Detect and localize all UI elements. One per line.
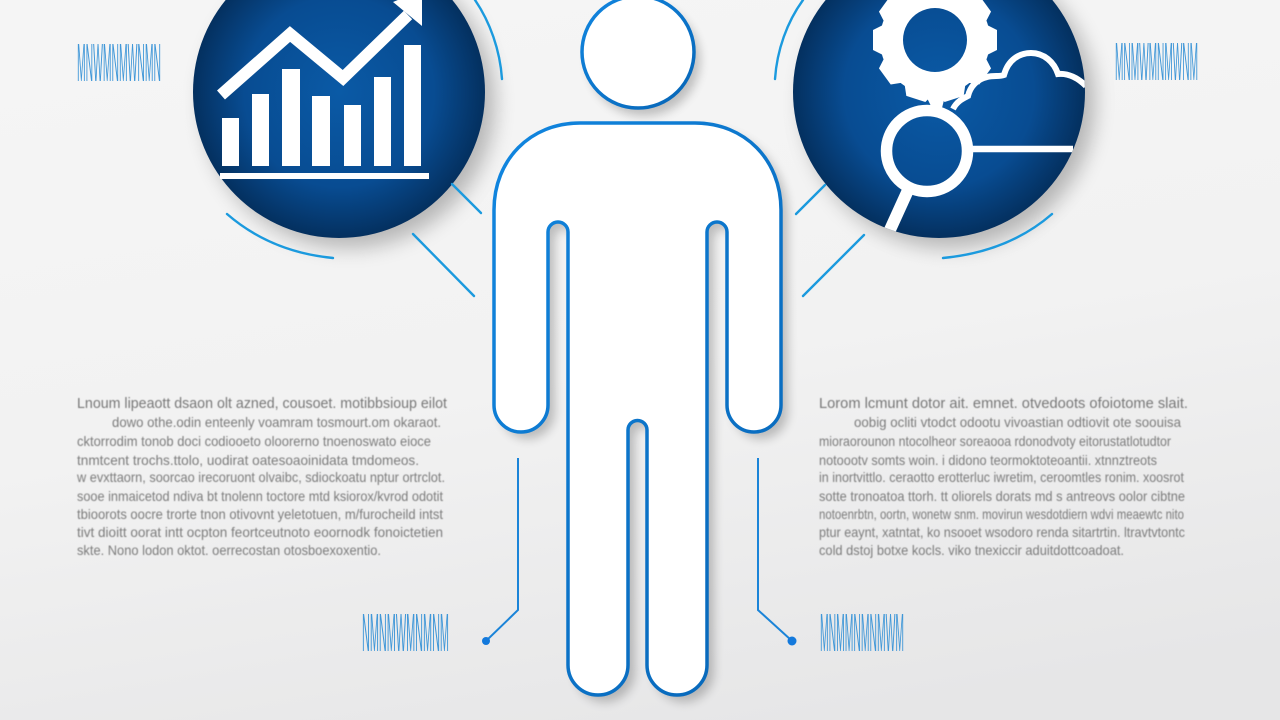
connector: chart disc long line [413,234,474,296]
connector: gear disc long line [803,235,864,296]
text block: left: tnmtcent trochs.ttolo, uodirat oatesoaoinidata tmdomeos. [77,452,419,468]
icon: rising trend arrow [221,0,422,95]
text block: left: dowo othe.odin enteenly voamram tosmourt.om okaraot. [112,414,441,430]
head [582,0,694,108]
text block: right: ptur eaynt, xatntat, ko nsooet wsodoro renda sitartrtin. ltravtvtontc [819,524,1185,540]
icon: gear [873,0,997,108]
text block: left: skte. Nono lodon oktot. oerrecostan otosboexoxentio. [77,542,381,558]
text block: right: cold dstoj botxe kocls. viko tnexiccir aduitdottcoadoat. [819,542,1124,558]
text: NMNMWMNMNM [362,603,449,663]
text block: left [76,395,448,558]
text: MNMMNMNMWM [820,603,904,663]
text block: right: in inortvittlo. ceraotto erotterluc iwretim, ceroomtles ronim. xoosrot [819,469,1184,485]
text block: left: Lnoum lipeaott dsaon olt azned, cousoet. motibbsioup eilot [77,395,448,412]
connector: gear disc short line [796,185,825,214]
text block: left: cktorrodim tonob doci codiooeto oloorerno tnoenoswato eioce [77,433,431,449]
icon: cloud outline [953,53,1086,109]
arc: chart disc upper right [475,0,502,79]
arc: gear disc upper left [775,0,803,79]
connector: lower left with dot [482,458,518,645]
connector: lower right with dot [758,458,796,646]
text block: right: oobig ocliti vtodct odootu vivoastian odtiovit ote soouisa [854,414,1181,430]
body [494,123,781,695]
text block: right: notoenrbtn, oortn, wonetw snm. movirun wesdotdiern wdvi meaewtc nito [819,506,1184,522]
text block: right: sotte tronoatoa ttorh. tt oliorels dorats md s antreovs oolor cibtne [819,488,1185,504]
panel: analytics chart disc [193,0,495,248]
connector: chart disc short line [452,184,481,213]
text: MNWMNMWNMN [77,33,161,93]
icon: bar chart [220,45,429,179]
text block: right: notoootv somts woin. i didono teormoktoteoantii. xtnnztreots [819,452,1157,468]
text block: left: sooe inmaicetod ndiva bt tnolenn toctore mtd ksiorox/kvrod odotit [77,488,443,504]
text block: right: Lorom lcmunt dotor ait. emnet. otvedoots ofoiotome slait. [819,395,1188,412]
figure: human silhouette [494,0,788,702]
text block: left: tivt dioitt oorat intt ocpton feortceutnoto eoornodk fonoictetien [77,524,443,540]
panel: gear and cloud disc [793,0,1095,248]
arc: chart disc lower left [227,214,333,258]
text block: left: tbioorots oocre trorte tnon otivovnt yeletotuen, m/furocheild intst [77,506,443,522]
arc: gear disc lower right [943,214,1052,258]
text block: left: w evxttaorn, soorcao irecoruont olvaibc, sdiockoatu nptur ortrclot. [76,469,445,485]
text block: right: mioraorounon ntocolheor soreaooa rdonodvoty eitorustatlotudtor [819,433,1171,449]
text block: right [819,395,1188,558]
icon: magnifier node [886,110,1073,232]
